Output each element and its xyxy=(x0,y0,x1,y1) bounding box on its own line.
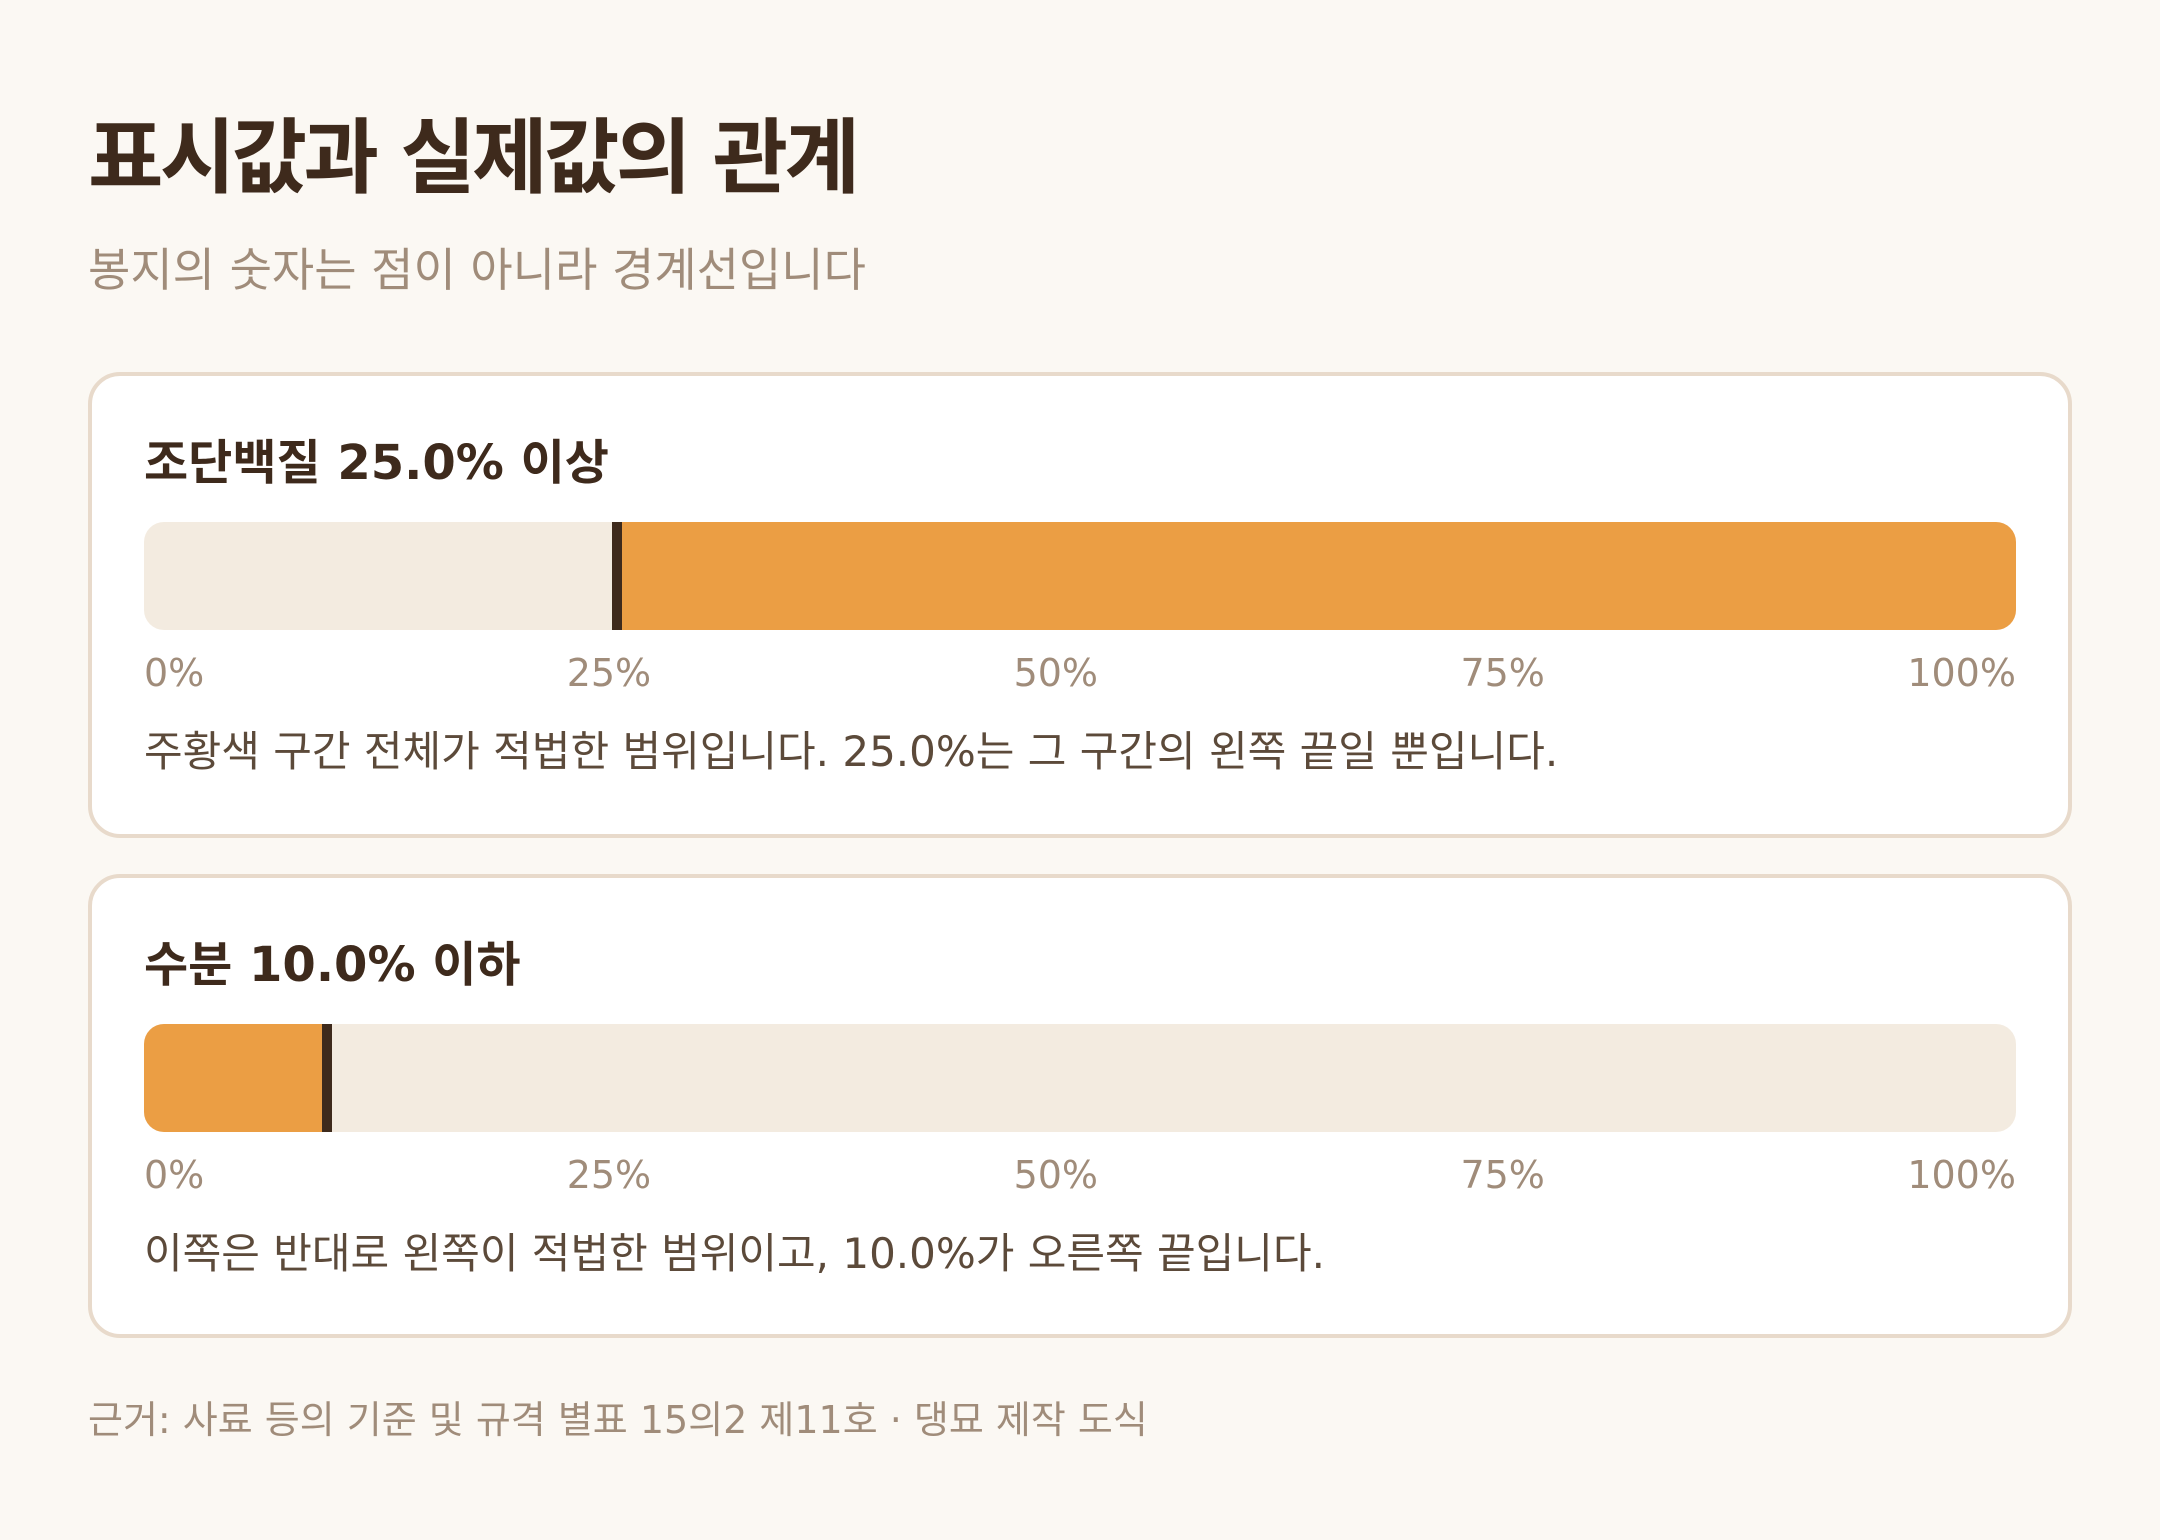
axis ticks: 25% xyxy=(567,1153,651,1197)
axis ticks xyxy=(144,1153,2016,1197)
bar chart: moisture range xyxy=(144,1024,2016,1132)
subtitle: 봉지의 숫자는 점이 아니라 경계선입니다 xyxy=(88,243,866,297)
bar chart: crude protein range xyxy=(144,522,2016,630)
axis ticks: 25% xyxy=(567,651,651,695)
source footer: 근거: 사료 등의 기준 및 규격 별표 15의2 제11호 · 댕묘 제작 도식 xyxy=(88,1398,1148,1442)
axis ticks: 50% xyxy=(1014,651,1098,695)
description: 주황색 구간 전체가 적법한 범위입니다. 25.0%는 그 구간의 왼쪽 끝일 뿐입니다. xyxy=(144,727,1558,776)
boundary marker at 25% xyxy=(612,522,622,630)
heading: crude protein: 조단백질 25.0% 이상 xyxy=(144,435,609,491)
axis ticks: 50% xyxy=(1014,1153,1098,1197)
panel: moisture xyxy=(88,874,2072,1338)
compliant range fill xyxy=(612,522,2016,630)
panel: crude protein xyxy=(88,372,2072,838)
heading: moisture: 수분 10.0% 이하 xyxy=(144,937,521,993)
axis ticks xyxy=(144,651,2016,695)
axis ticks: 0% xyxy=(144,651,204,695)
boundary marker at 10% xyxy=(322,1024,332,1132)
compliant range fill xyxy=(144,1024,322,1132)
description: 이쪽은 반대로 왼쪽이 적법한 범위이고, 10.0%가 오른쪽 끝입니다. xyxy=(144,1229,1325,1278)
axis ticks: 75% xyxy=(1460,1153,1545,1197)
title: 표시값과 실제값의 관계 xyxy=(88,111,856,206)
axis ticks: 0% xyxy=(144,1153,204,1197)
axis ticks: 100% xyxy=(1907,1153,2016,1197)
axis ticks: 100% xyxy=(1907,651,2016,695)
axis ticks: 75% xyxy=(1460,651,1545,695)
